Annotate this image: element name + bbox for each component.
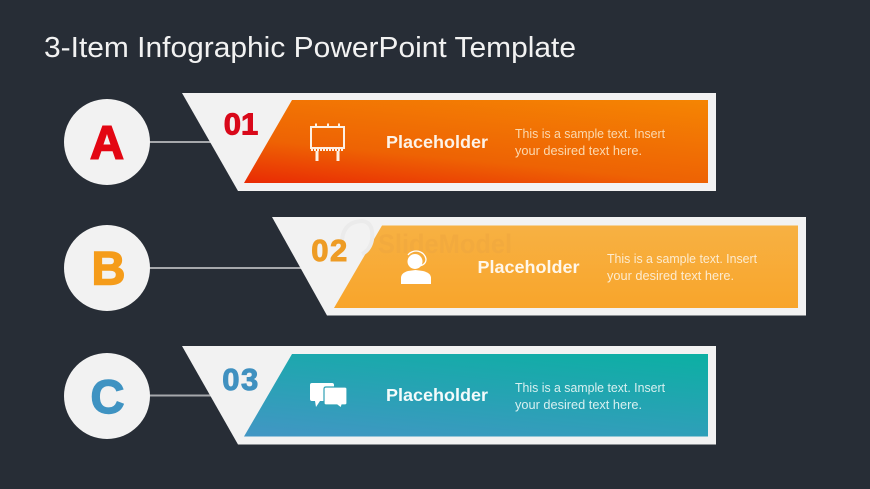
circle B [64,225,150,311]
icon: support agent [401,251,431,284]
body text 01: This is a sample text. Insert [515,127,666,141]
body text 02 [607,252,758,283]
body text 01: your desired text here. [515,144,642,158]
circle C [64,353,150,439]
watermark [342,221,512,259]
body text 01 [515,127,666,158]
colour panel 01 [244,100,708,183]
heading 02: Placeholder [478,257,580,277]
connector A [149,141,213,143]
row A [64,93,716,191]
body text 02: This is a sample text. Insert [607,252,758,266]
circle A [64,99,150,185]
number 02: 02 [311,233,349,268]
banner 02 [272,217,806,316]
circle C: C [91,370,124,423]
connector C [149,394,213,396]
banner 01 [182,93,716,191]
number 03: 03 [222,362,260,397]
circle B: B [92,242,125,294]
row B [64,217,806,316]
heading 01: Placeholder [386,132,488,152]
icon: billboard [311,124,344,161]
body text 02: your desired text here. [607,269,734,283]
number 01: 01 [224,106,258,142]
colour panel 03 [244,354,708,436]
banner 03 [182,346,716,444]
row C [64,346,716,444]
title: 3-Item Infographic PowerPoint Template [44,32,576,64]
colour panel 02 [334,226,798,308]
body text 03: your desired text here. [515,398,642,412]
body text 03: This is a sample text. Insert [515,381,666,395]
heading 03: Placeholder [386,385,488,405]
body text 03 [515,381,666,412]
circle A: A [90,116,124,169]
icon: speech bubbles [310,383,347,408]
connector B [149,267,303,269]
watermark: SlideModel [378,229,512,259]
